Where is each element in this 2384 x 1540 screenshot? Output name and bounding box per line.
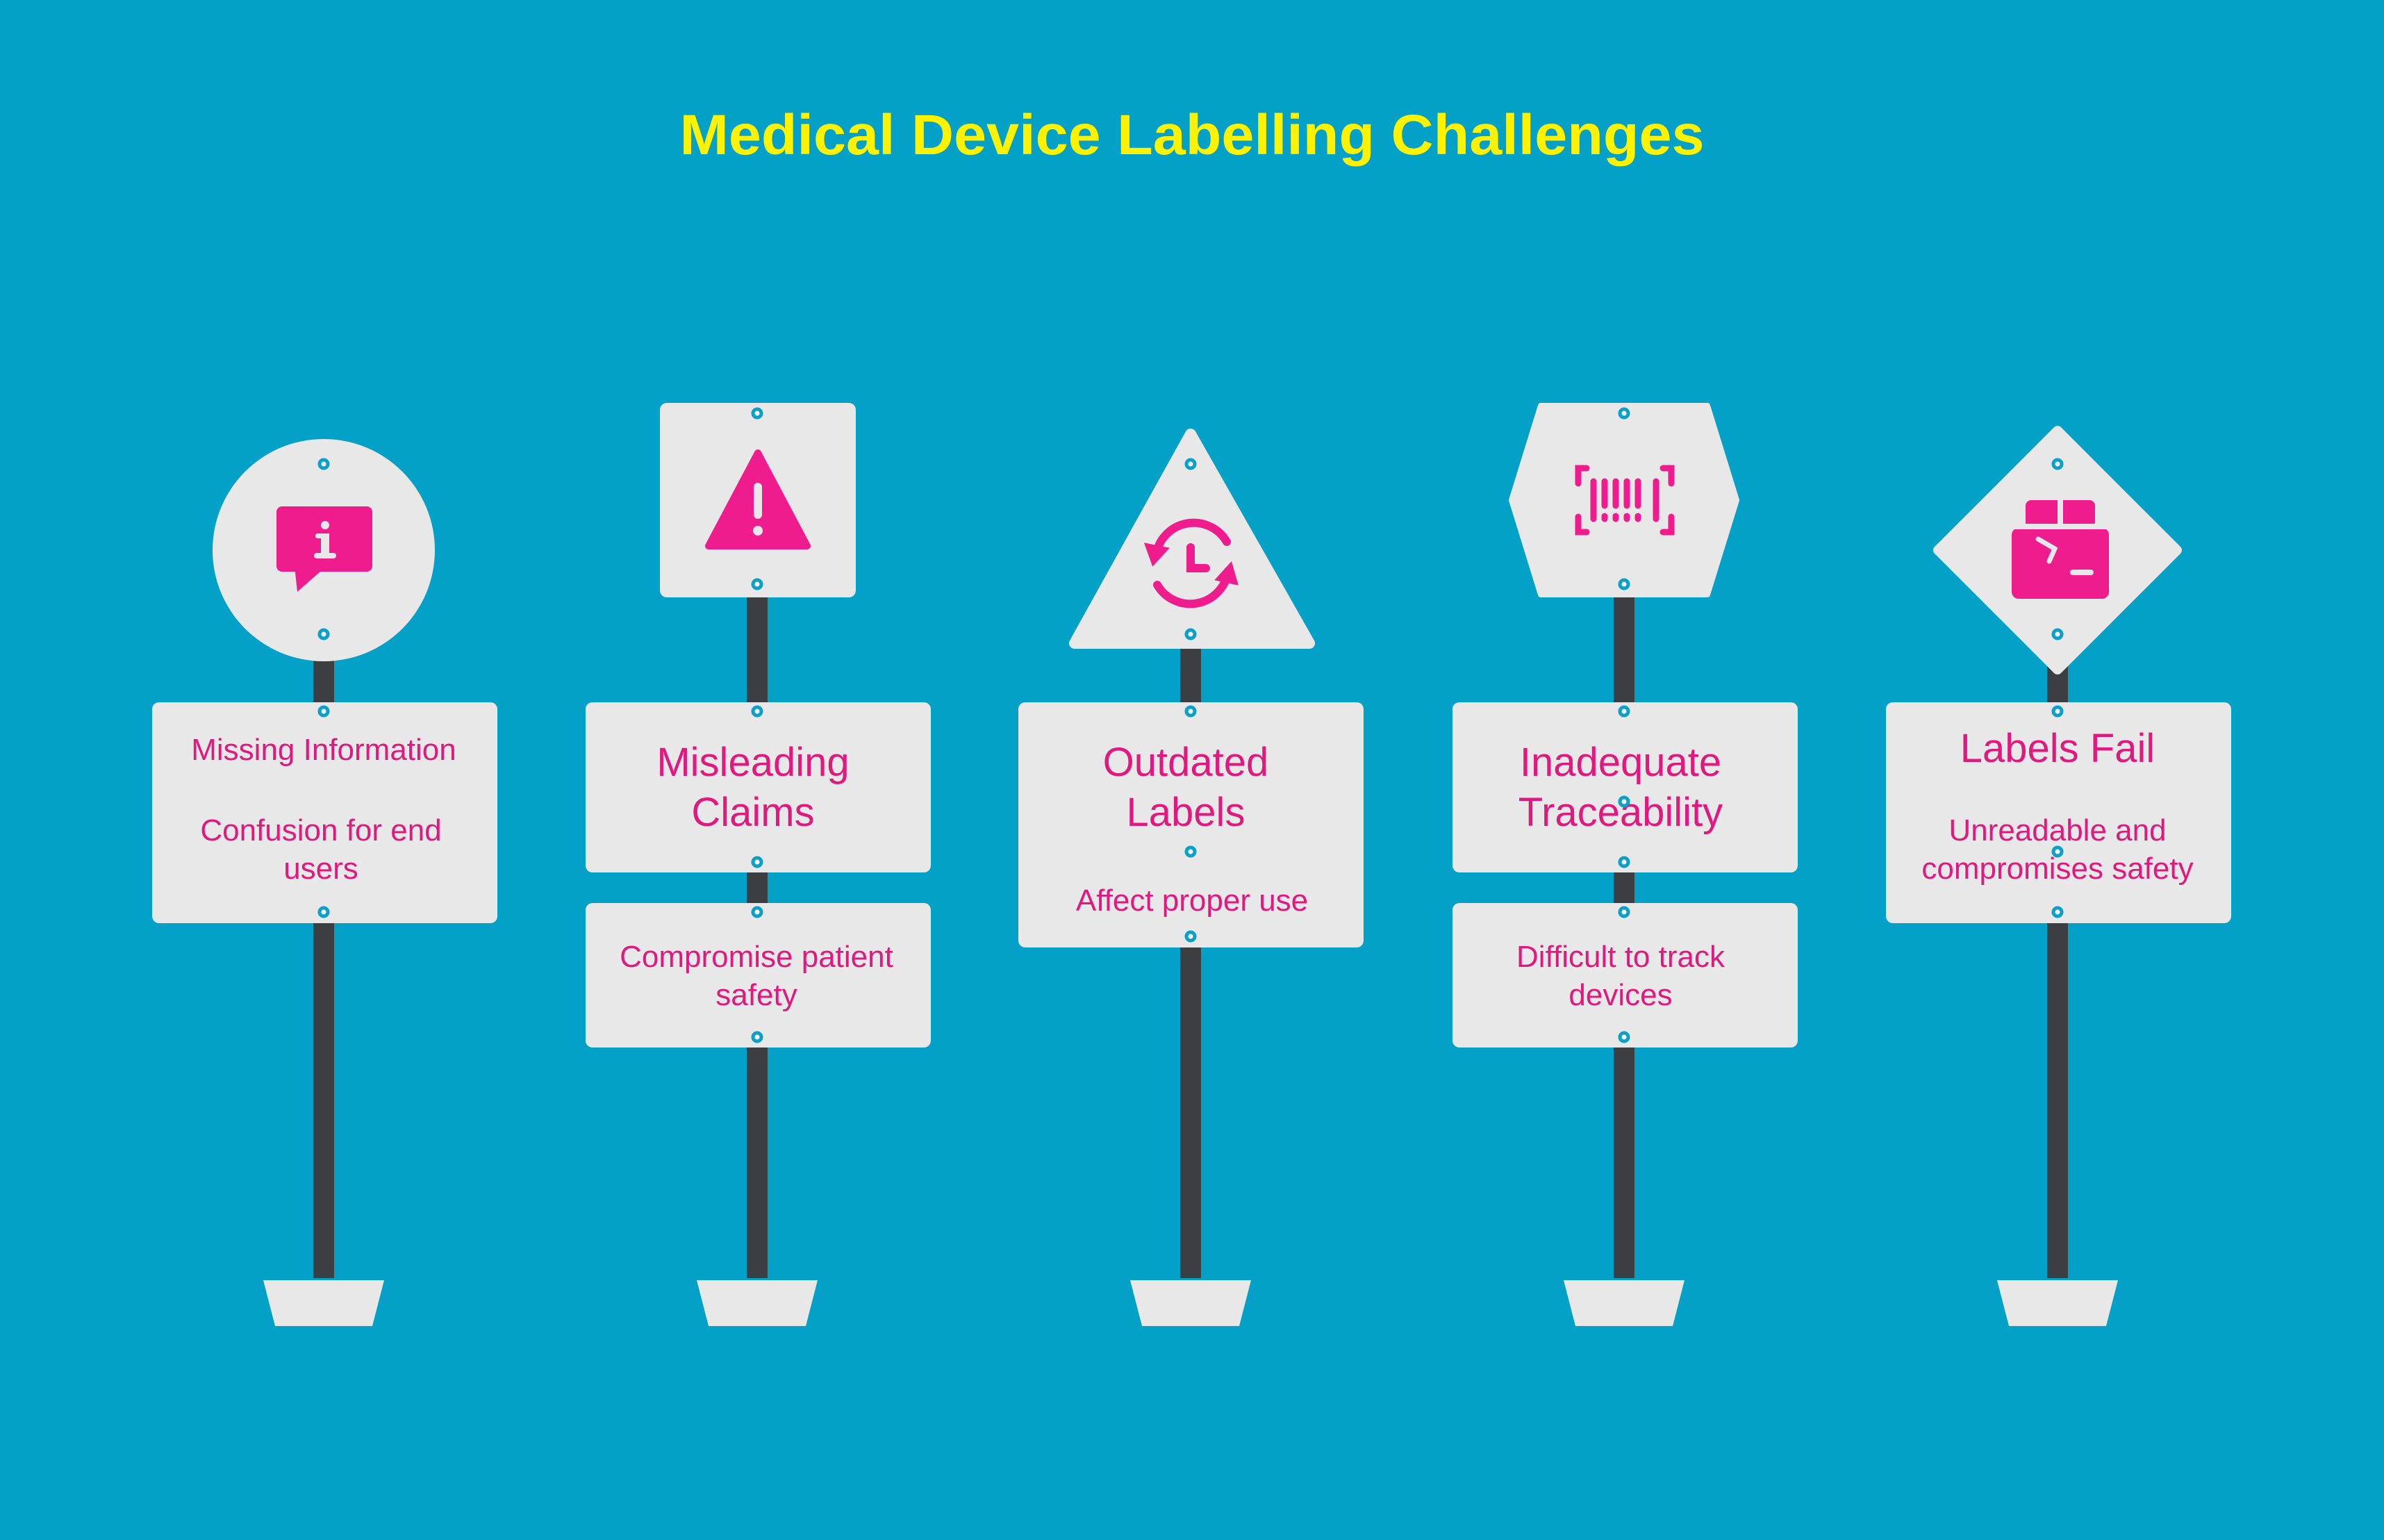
pole 2 xyxy=(747,590,768,1278)
panel 1 text: users xyxy=(283,852,358,886)
panel 2b xyxy=(586,903,931,1048)
pole 1 xyxy=(313,625,334,1278)
base 5 xyxy=(1997,1280,2118,1326)
base 1 xyxy=(263,1280,384,1326)
panel 1 xyxy=(152,702,497,923)
panel 2 text: Claims xyxy=(691,790,815,835)
panel 4 text: devices xyxy=(1568,978,1673,1012)
icon: barcode xyxy=(1578,468,1671,532)
panel 4 text xyxy=(1516,740,1725,1012)
panel 3 text: Labels xyxy=(1127,790,1245,835)
base 4 xyxy=(1564,1280,1684,1326)
panel 5 text: Labels Fail xyxy=(1960,726,2155,771)
post 5: Labels Fail xyxy=(1886,431,2231,1326)
sign: hexagon xyxy=(1512,406,1737,595)
panel 2 text: Compromise patient xyxy=(620,940,893,974)
panel 3 text: Affect proper use xyxy=(1076,884,1308,918)
panel 2 text: safety xyxy=(715,978,797,1012)
post 4: Inadequate Traceability xyxy=(1452,406,1798,1326)
panel 5 text xyxy=(1921,726,2194,886)
icon: info bubble xyxy=(276,506,372,592)
icon: broken box xyxy=(2012,500,2109,599)
sign: diamond xyxy=(1938,431,2177,670)
sign: square xyxy=(660,403,856,597)
panel 5 text: Unreadable and xyxy=(1948,813,2167,847)
post 2: Misleading Claims xyxy=(586,403,931,1326)
base 2 xyxy=(697,1280,818,1326)
panel 3 text: Outdated xyxy=(1103,740,1268,785)
panel 4 text: Difficult to track xyxy=(1516,940,1725,974)
pole 5 xyxy=(2047,653,2068,1278)
panel 5 text: compromises safety xyxy=(1921,852,2194,886)
panel 2 text: Misleading xyxy=(656,740,850,785)
title: Medical Device Labelling Challenges xyxy=(679,104,1705,167)
panel 3 text xyxy=(1076,740,1308,918)
icon: warning triangle xyxy=(709,453,807,546)
sign: circle xyxy=(213,439,435,661)
pole 4 xyxy=(1614,590,1634,1278)
panel 4 text: Traceability xyxy=(1518,790,1723,835)
panel 4a xyxy=(1452,702,1798,872)
panel 2 text xyxy=(620,740,893,1012)
icon: clock refresh xyxy=(1146,523,1236,604)
pole 3 xyxy=(1180,639,1201,1278)
post 3: Outdated Labels xyxy=(1018,434,1364,1326)
panel 1 text: Confusion for end xyxy=(200,813,442,847)
panel 3 xyxy=(1018,702,1364,947)
panel 1 text: Missing Information xyxy=(191,733,456,767)
panel 4 text: Inadequate xyxy=(1520,740,1721,785)
post 1: Missing Information xyxy=(152,439,497,1326)
panel 1 text xyxy=(191,733,456,886)
panel 4b xyxy=(1452,903,1798,1048)
base 3 xyxy=(1130,1280,1251,1326)
panel 2a xyxy=(586,702,931,872)
panel 5 xyxy=(1886,702,2231,923)
sign: triangle xyxy=(1075,434,1309,643)
